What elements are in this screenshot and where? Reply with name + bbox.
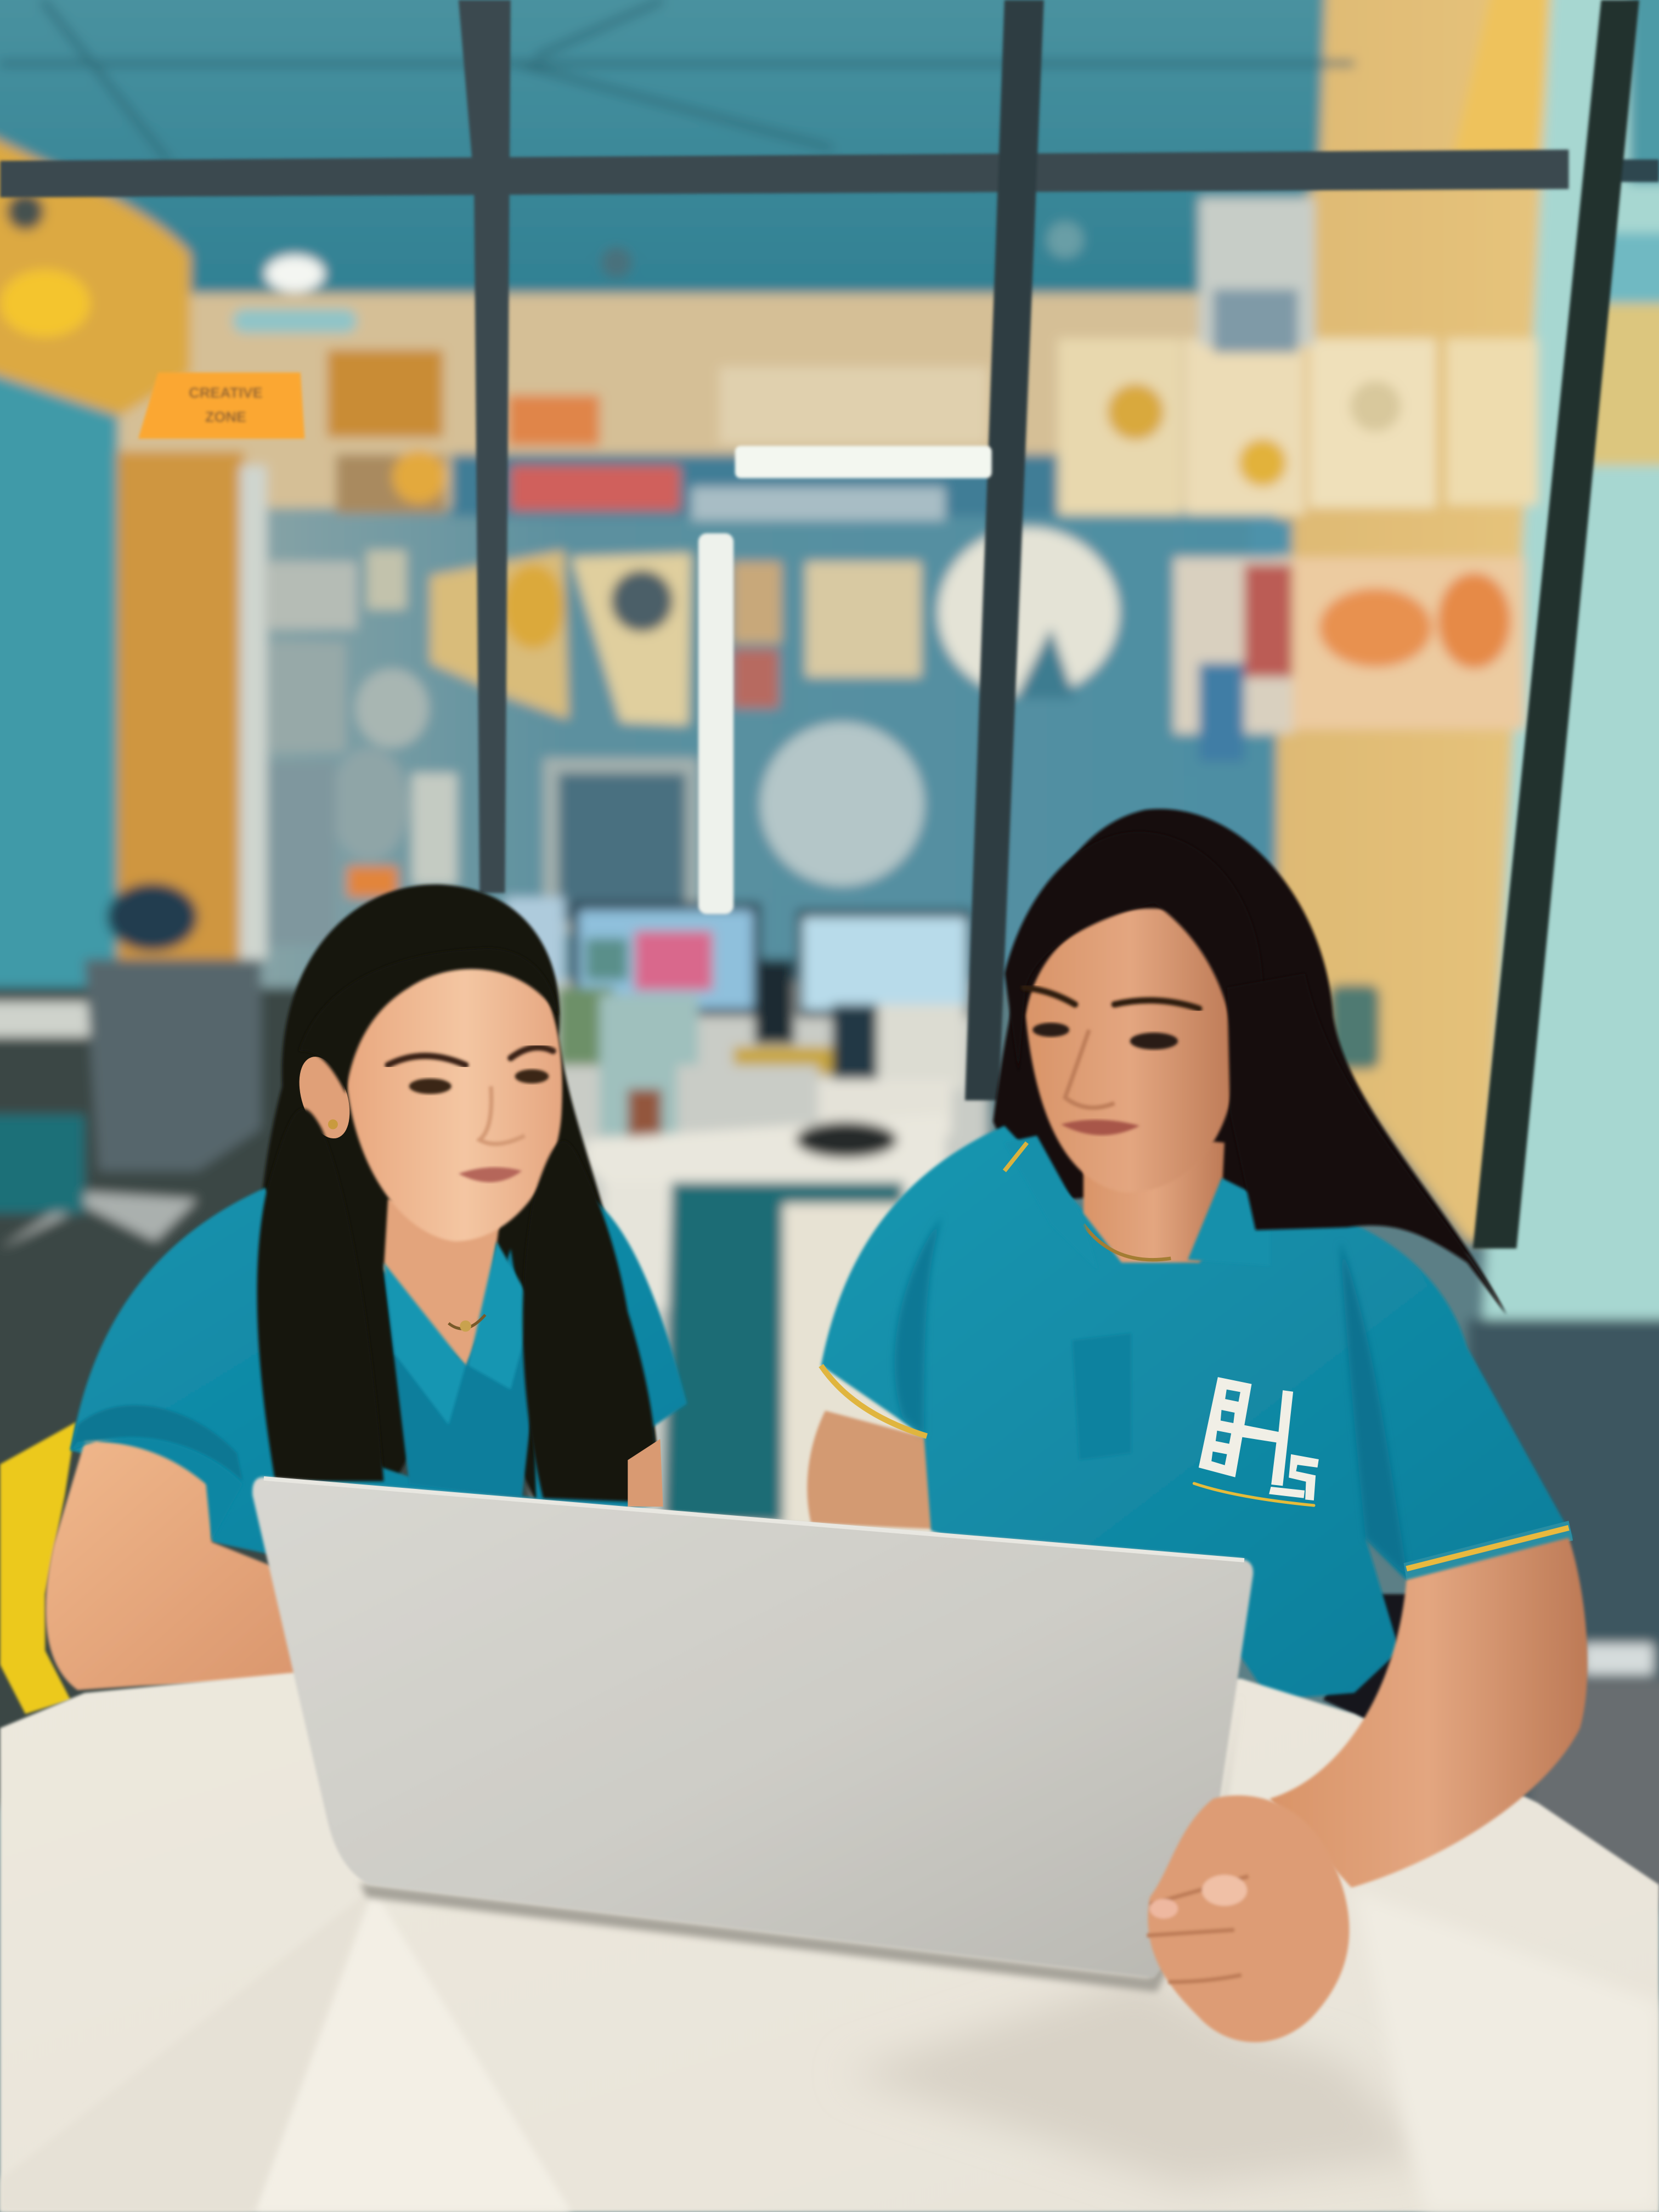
yellow curved wall bbox=[1199, 0, 1559, 1242]
shirt body bbox=[821, 1126, 1573, 1700]
earring bbox=[328, 1119, 338, 1129]
right rail stub bbox=[1608, 160, 1659, 182]
left floor bbox=[0, 988, 536, 1805]
far right top teal bbox=[1629, 0, 1659, 183]
far right pale wall bbox=[1481, 0, 1659, 1355]
left teal wall bbox=[0, 374, 119, 1009]
laptop lid bbox=[252, 1477, 1253, 1978]
laptop shadow bbox=[360, 1693, 1242, 1992]
table bbox=[0, 1672, 1659, 2212]
chair bbox=[84, 960, 261, 1171]
hand shadow bbox=[847, 1975, 1425, 2187]
hand on laptop bbox=[1147, 1796, 1349, 2042]
white lamp bbox=[265, 255, 324, 292]
sign text: CREATIVE bbox=[189, 385, 263, 401]
desk cabinet white bbox=[604, 1182, 689, 1309]
yellow dome bbox=[0, 127, 190, 416]
reflection left bbox=[0, 1891, 370, 2212]
desk top bbox=[585, 1114, 945, 1202]
floor reflection bbox=[1583, 1644, 1654, 1674]
shirt shadow fold bbox=[383, 1249, 533, 1498]
monitors bbox=[505, 897, 565, 982]
desk clutter bbox=[557, 988, 614, 1065]
wall band with posters bbox=[0, 294, 1312, 526]
far right teal upper bbox=[1594, 233, 1659, 303]
hair falling right bbox=[1227, 973, 1506, 1315]
sleeve hem bbox=[71, 1405, 242, 1481]
left desk bbox=[0, 1002, 99, 1037]
far right floor bbox=[1467, 1319, 1659, 1911]
wall art bbox=[265, 561, 357, 629]
right collar bbox=[469, 1242, 533, 1390]
phone on desk bbox=[795, 1121, 897, 1158]
ceiling beams bbox=[0, 0, 1355, 162]
right vertical bar bbox=[1473, 0, 1639, 1249]
pillar bbox=[117, 452, 244, 966]
pendant bbox=[460, 1321, 471, 1331]
nose bbox=[1065, 1030, 1114, 1108]
eyebrows bbox=[388, 1047, 553, 1065]
far right poster bbox=[1587, 303, 1659, 466]
teal low block bbox=[0, 1114, 84, 1213]
neck bbox=[1084, 1128, 1224, 1262]
hair back bbox=[993, 809, 1506, 1315]
small orange tag bbox=[347, 866, 398, 897]
lamp glow bbox=[233, 309, 357, 333]
orange sign bbox=[138, 373, 304, 439]
horizontal tube bbox=[735, 446, 992, 478]
green chair beyond bbox=[1329, 985, 1380, 1069]
nails bbox=[1202, 1875, 1247, 1906]
neck bbox=[383, 1199, 501, 1365]
reflection panel bbox=[254, 1891, 571, 2212]
right forearm sliver bbox=[628, 1439, 663, 1506]
laptop bbox=[252, 1477, 1253, 1992]
waist shadow bbox=[1323, 1594, 1446, 1724]
light tubes bbox=[698, 446, 992, 914]
yellow wall top highlight bbox=[1453, 0, 1563, 155]
left vertical bar bbox=[459, 0, 511, 893]
nose bbox=[479, 1086, 525, 1144]
left sleeve yellow stripe bbox=[821, 1365, 927, 1436]
shirt bbox=[71, 1188, 687, 1566]
right sleeve cuff bbox=[1404, 1521, 1573, 1580]
lid top edge bbox=[264, 1479, 1244, 1560]
fingers bbox=[1147, 1876, 1249, 1982]
dome highlight bbox=[0, 269, 91, 337]
chair base bbox=[0, 1192, 198, 1249]
mouth bbox=[1061, 1120, 1140, 1135]
vertical tube bbox=[698, 533, 733, 914]
right highlight bbox=[1355, 1891, 1659, 2212]
centre vertical bar bbox=[965, 0, 1044, 1101]
top horizontal rail bbox=[0, 150, 1568, 198]
table top bbox=[0, 1672, 1659, 2212]
right sleeve yellow stripe bbox=[1407, 1528, 1568, 1568]
carpet bbox=[1523, 1679, 1659, 1918]
eyes bbox=[1032, 1023, 1069, 1037]
left arm bbox=[807, 1410, 938, 1529]
right posters bbox=[1173, 557, 1294, 733]
left collar bbox=[383, 1262, 466, 1425]
logo underline bbox=[1194, 1483, 1314, 1505]
sleeve cuff bbox=[71, 1438, 242, 1541]
orange sign: ZONE bbox=[205, 409, 246, 425]
sleeve shadow bbox=[1340, 1242, 1408, 1577]
arm bbox=[46, 1441, 328, 1690]
back office wash bbox=[536, 980, 988, 1545]
mouth bbox=[459, 1167, 522, 1182]
hair over forehead bbox=[1005, 832, 1263, 1100]
person behind bbox=[107, 883, 198, 951]
collar bbox=[1005, 1136, 1269, 1269]
yellow chair bbox=[0, 1422, 76, 1714]
right arm bbox=[1269, 1538, 1588, 1888]
shirt logo: HS embroidery bbox=[1194, 1377, 1319, 1505]
glass frame: metal bars bbox=[0, 0, 1659, 1249]
face bbox=[346, 953, 562, 1242]
white door bbox=[783, 1203, 938, 1542]
collar tip stripe bbox=[1005, 1143, 1027, 1171]
eyebrows bbox=[1024, 988, 1199, 1009]
hair strands over shoulder bbox=[257, 1109, 383, 1481]
logo mark bbox=[1199, 1377, 1252, 1477]
teal cabinet bbox=[663, 1182, 903, 1523]
hair back bbox=[257, 884, 657, 1503]
ceiling bbox=[0, 0, 1659, 318]
white column edge bbox=[240, 466, 267, 960]
shoulder shading bbox=[894, 1216, 943, 1436]
necklace bbox=[1084, 1224, 1171, 1260]
hanging lights bbox=[7, 193, 44, 230]
ear bbox=[290, 1050, 359, 1145]
eyes bbox=[409, 1079, 452, 1094]
colourful poster strip bbox=[328, 350, 443, 437]
left face hair line bbox=[299, 948, 558, 1093]
person: left woman bbox=[46, 884, 687, 1690]
person: right woman bbox=[807, 809, 1573, 1724]
face bbox=[1025, 909, 1235, 1192]
upper right posters bbox=[1058, 338, 1182, 515]
necklace bbox=[449, 1315, 486, 1329]
placket bbox=[1072, 1333, 1131, 1460]
blue feature wall bbox=[254, 508, 1298, 988]
